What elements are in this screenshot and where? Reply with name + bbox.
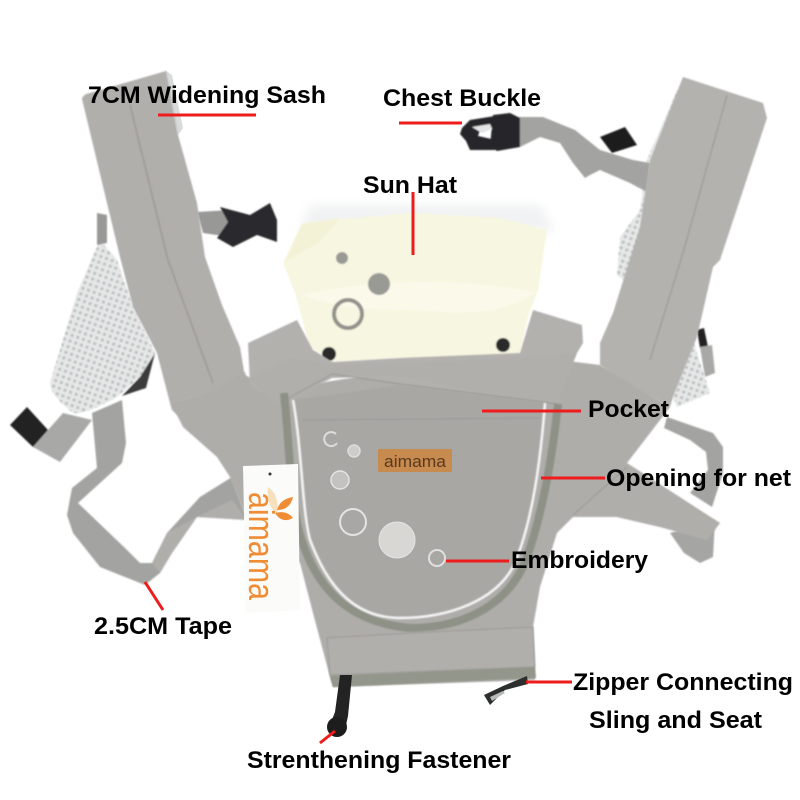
label: Sun Hat [363,172,457,255]
label: 7CM Widening Sash: 7CM Widening Sash [88,82,326,109]
label: Zipper Connecting Sling and Seat: Sling and Seat [589,707,762,734]
left back tape strap [10,400,247,585]
label: 2.5CM Tape [94,582,232,640]
bottom band [327,627,536,687]
hat dots [322,252,510,361]
left shoulder strap [82,71,258,445]
left buckle [197,203,277,247]
hang tag [241,464,300,613]
brand patch: aimama [384,452,447,471]
strengthening fastener strap [327,675,352,737]
zipper pull [484,676,528,705]
pocket zipper tape [284,393,558,628]
hat shadow [300,205,555,232]
label: Zipper Connecting Sling and Seat: Zipper Connecting [573,669,793,696]
label: Zipper Connecting Sling and Seat [526,669,793,734]
label: Pocket: Pocket [588,396,669,423]
tag leaves logo [268,487,293,520]
carrier body [172,360,720,687]
left mesh pad [50,213,155,413]
label: 2.5CM Tape: 2.5CM Tape [94,613,232,640]
label: Sun Hat: Sun Hat [363,172,457,199]
pocket [293,385,545,618]
tag brand text: aimama [241,492,282,601]
chest strap and buckle [460,113,650,192]
right shoulder strap [600,77,767,407]
right mesh pad [617,90,710,407]
label: Strenthening Fastener [247,731,511,774]
embroidery circles [324,432,445,566]
right back tape strap [664,328,723,563]
top flap [248,310,583,405]
sun hat [283,213,547,362]
label: Embroidery: Embroidery [511,547,649,574]
label: Opening for net: Opening for net [606,465,791,492]
left top mesh edge [165,70,183,135]
label: Strenthening Fastener: Strenthening Fastener [247,747,511,774]
brand patch [378,449,452,472]
label: Chest Buckle: Chest Buckle [383,85,541,112]
